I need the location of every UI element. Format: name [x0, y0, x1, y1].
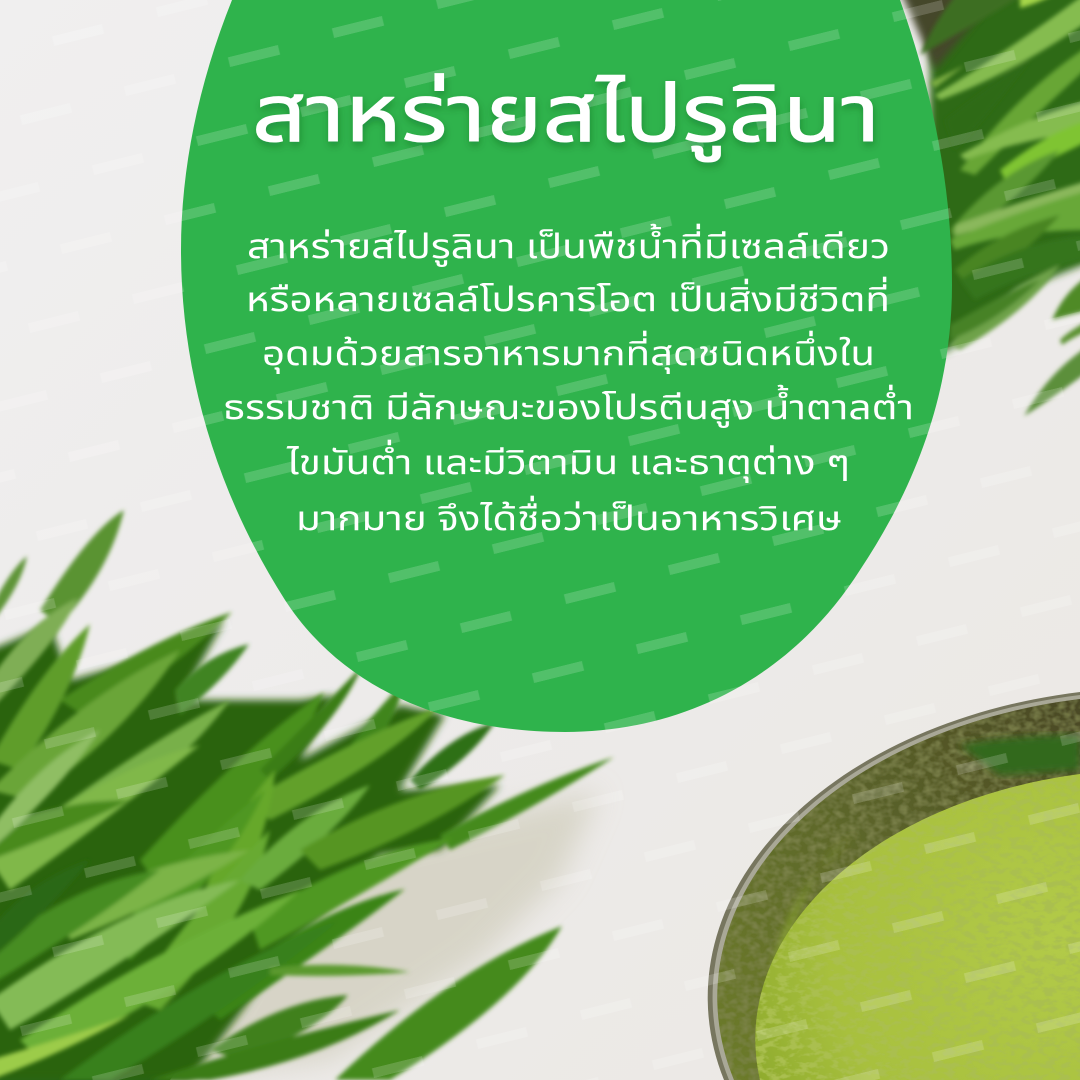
title: สาหร่ายสไปรูลินา — [252, 56, 880, 177]
body text — [223, 223, 914, 546]
body text: ธรรมชาติ มีลักษณะของโปรตีนสูง น้ำตาลต่ำ — [223, 384, 914, 435]
rim highlight — [713, 695, 1080, 1080]
body text: อุดมด้วยสารอาหารมากที่สุดชนิดหนึ่งใน — [262, 330, 875, 381]
green oval panel — [181, 0, 952, 732]
body text: สาหร่ายสไปรูลินา เป็นพืชน้ำที่มีเซลล์เดียว — [247, 223, 890, 274]
body text: หรือหลายเซลล์โปรคาริโอต เป็นสิ่งมีชีวิตที่ — [246, 276, 890, 327]
photo: wheatgrass bottom left — [0, 510, 614, 1080]
powder surface — [755, 774, 1080, 1080]
body text: ไขมันต่ำ และมีวิตามิน และธาตุต่าง ๆ — [286, 439, 850, 490]
leaf shadow on table — [180, 790, 600, 1078]
bowl outer rim — [708, 692, 1080, 1080]
bowl inner wall — [717, 699, 1080, 1080]
body text: มากมาย จึงได้ชื่อว่าเป็นอาหารวิเศษ — [296, 495, 842, 546]
photo: bowl of green powder — [708, 692, 1080, 1080]
photo: wheatgrass top right — [900, 0, 1080, 416]
